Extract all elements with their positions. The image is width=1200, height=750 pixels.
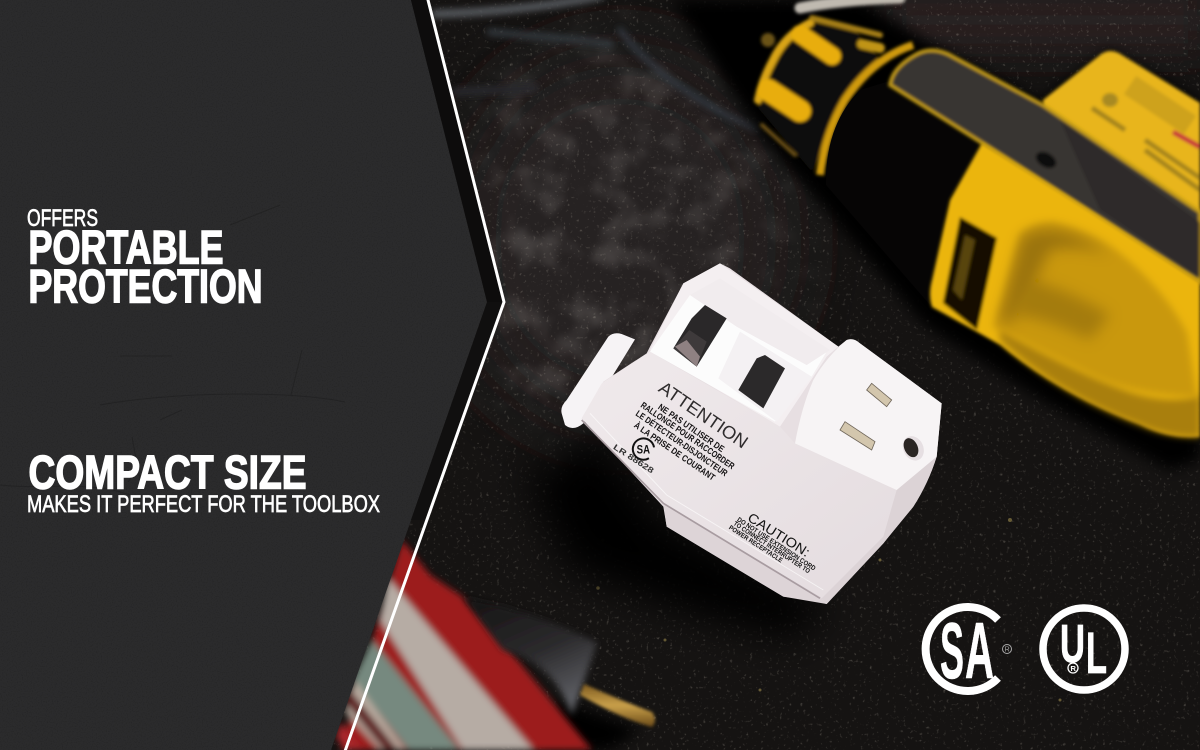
- label text: CAUTION: POWER RECEPTACLE: [727, 524, 784, 565]
- drill battery: [1043, 51, 1200, 225]
- label text: ATTENTION: LR 88628: [612, 442, 656, 476]
- drill grey strip: [890, 50, 1200, 282]
- photo background: workbench: [331, 0, 1200, 750]
- label text: ATTENTION: À LA PRISE DE COURANT: [632, 419, 718, 483]
- recess centre panel: [718, 332, 812, 422]
- certification logo: CSA: R: [1005, 647, 1010, 654]
- white chevron line: [344, 0, 504, 750]
- heading: compact size: MAKES IT PERFECT FOR THE TOOLBOX: [27, 491, 380, 518]
- drill shadow: [672, 0, 1200, 470]
- mini CSA mark: [629, 435, 656, 462]
- label text: CAUTION: DO NOT USE EXTENSION CORD: [736, 516, 817, 573]
- dark band beside panel at top: [411, 0, 504, 302]
- mini CSA mark: SA: [637, 442, 650, 456]
- adapter shadow: [525, 430, 830, 640]
- plug boot: [463, 597, 597, 715]
- adapter: [561, 263, 942, 604]
- upper frame face: [690, 278, 830, 365]
- drill yellow housing: [930, 143, 1200, 438]
- blurred cables: [435, 0, 755, 128]
- certification logo: CSA: [926, 606, 1012, 695]
- ground hole: [899, 433, 928, 464]
- large switch: [673, 305, 727, 367]
- label text: ATTENTION: LE DÉTECTEUR-DISJONCTEUR: [634, 408, 730, 478]
- drill grip with yellow bands: [758, 0, 913, 175]
- label text: ATTENTION: [612, 377, 752, 483]
- boot shadow: [540, 700, 640, 750]
- certification logo: CSA: S: [940, 606, 964, 695]
- yellow drill: [672, 0, 1200, 470]
- socket plate: [795, 339, 942, 490]
- label text: ATTENTION: RALLONGE POUR RACCORDER: [639, 400, 737, 471]
- certification logo: UL: [1043, 608, 1125, 690]
- heading: offers portable protection: OFFERS: [27, 205, 98, 232]
- heading: offers portable protection: PORTABLE: [28, 220, 224, 274]
- dust specks: [596, 518, 1062, 702]
- certification logo: CSA: A: [965, 606, 994, 695]
- certification logo: UL: U: [1060, 614, 1085, 674]
- left tab: [561, 333, 635, 428]
- cord stripes: [336, 540, 592, 750]
- front face: [582, 352, 897, 598]
- label text: ATTENTION: NE PAS UTILISER DE: [656, 402, 726, 454]
- top housing frame: [650, 263, 838, 427]
- right side shade: [822, 457, 937, 604]
- plug base: [663, 503, 827, 604]
- housing silhouette: [582, 263, 942, 604]
- label text: CAUTION: TO CONNECT INTERRUPTER TO: [732, 520, 811, 575]
- gold pin: [580, 684, 655, 727]
- drill body: [826, 80, 985, 305]
- label text: CAUTION: CAUTION:: [745, 510, 813, 560]
- switch recess: [650, 295, 827, 422]
- heading: offers portable protection: PROTECTION: [28, 260, 262, 312]
- panel scratches: [0, 205, 345, 495]
- dark left panel: [0, 0, 500, 750]
- dark band beside panel at lower edge: [411, 302, 504, 520]
- socket slots: [840, 383, 892, 450]
- heading: compact size: COMPACT SIZE: [28, 446, 306, 498]
- front lip line: [582, 420, 820, 598]
- small switch: [738, 355, 785, 408]
- certification logo: UL: R: [1070, 664, 1076, 673]
- certification logo: UL: L: [1086, 621, 1107, 686]
- label text: ATTENTION: ATTENTION: [655, 377, 752, 452]
- blurred red and white cord at bottom left: [336, 540, 655, 750]
- heading: offers portable protection: [27, 205, 262, 312]
